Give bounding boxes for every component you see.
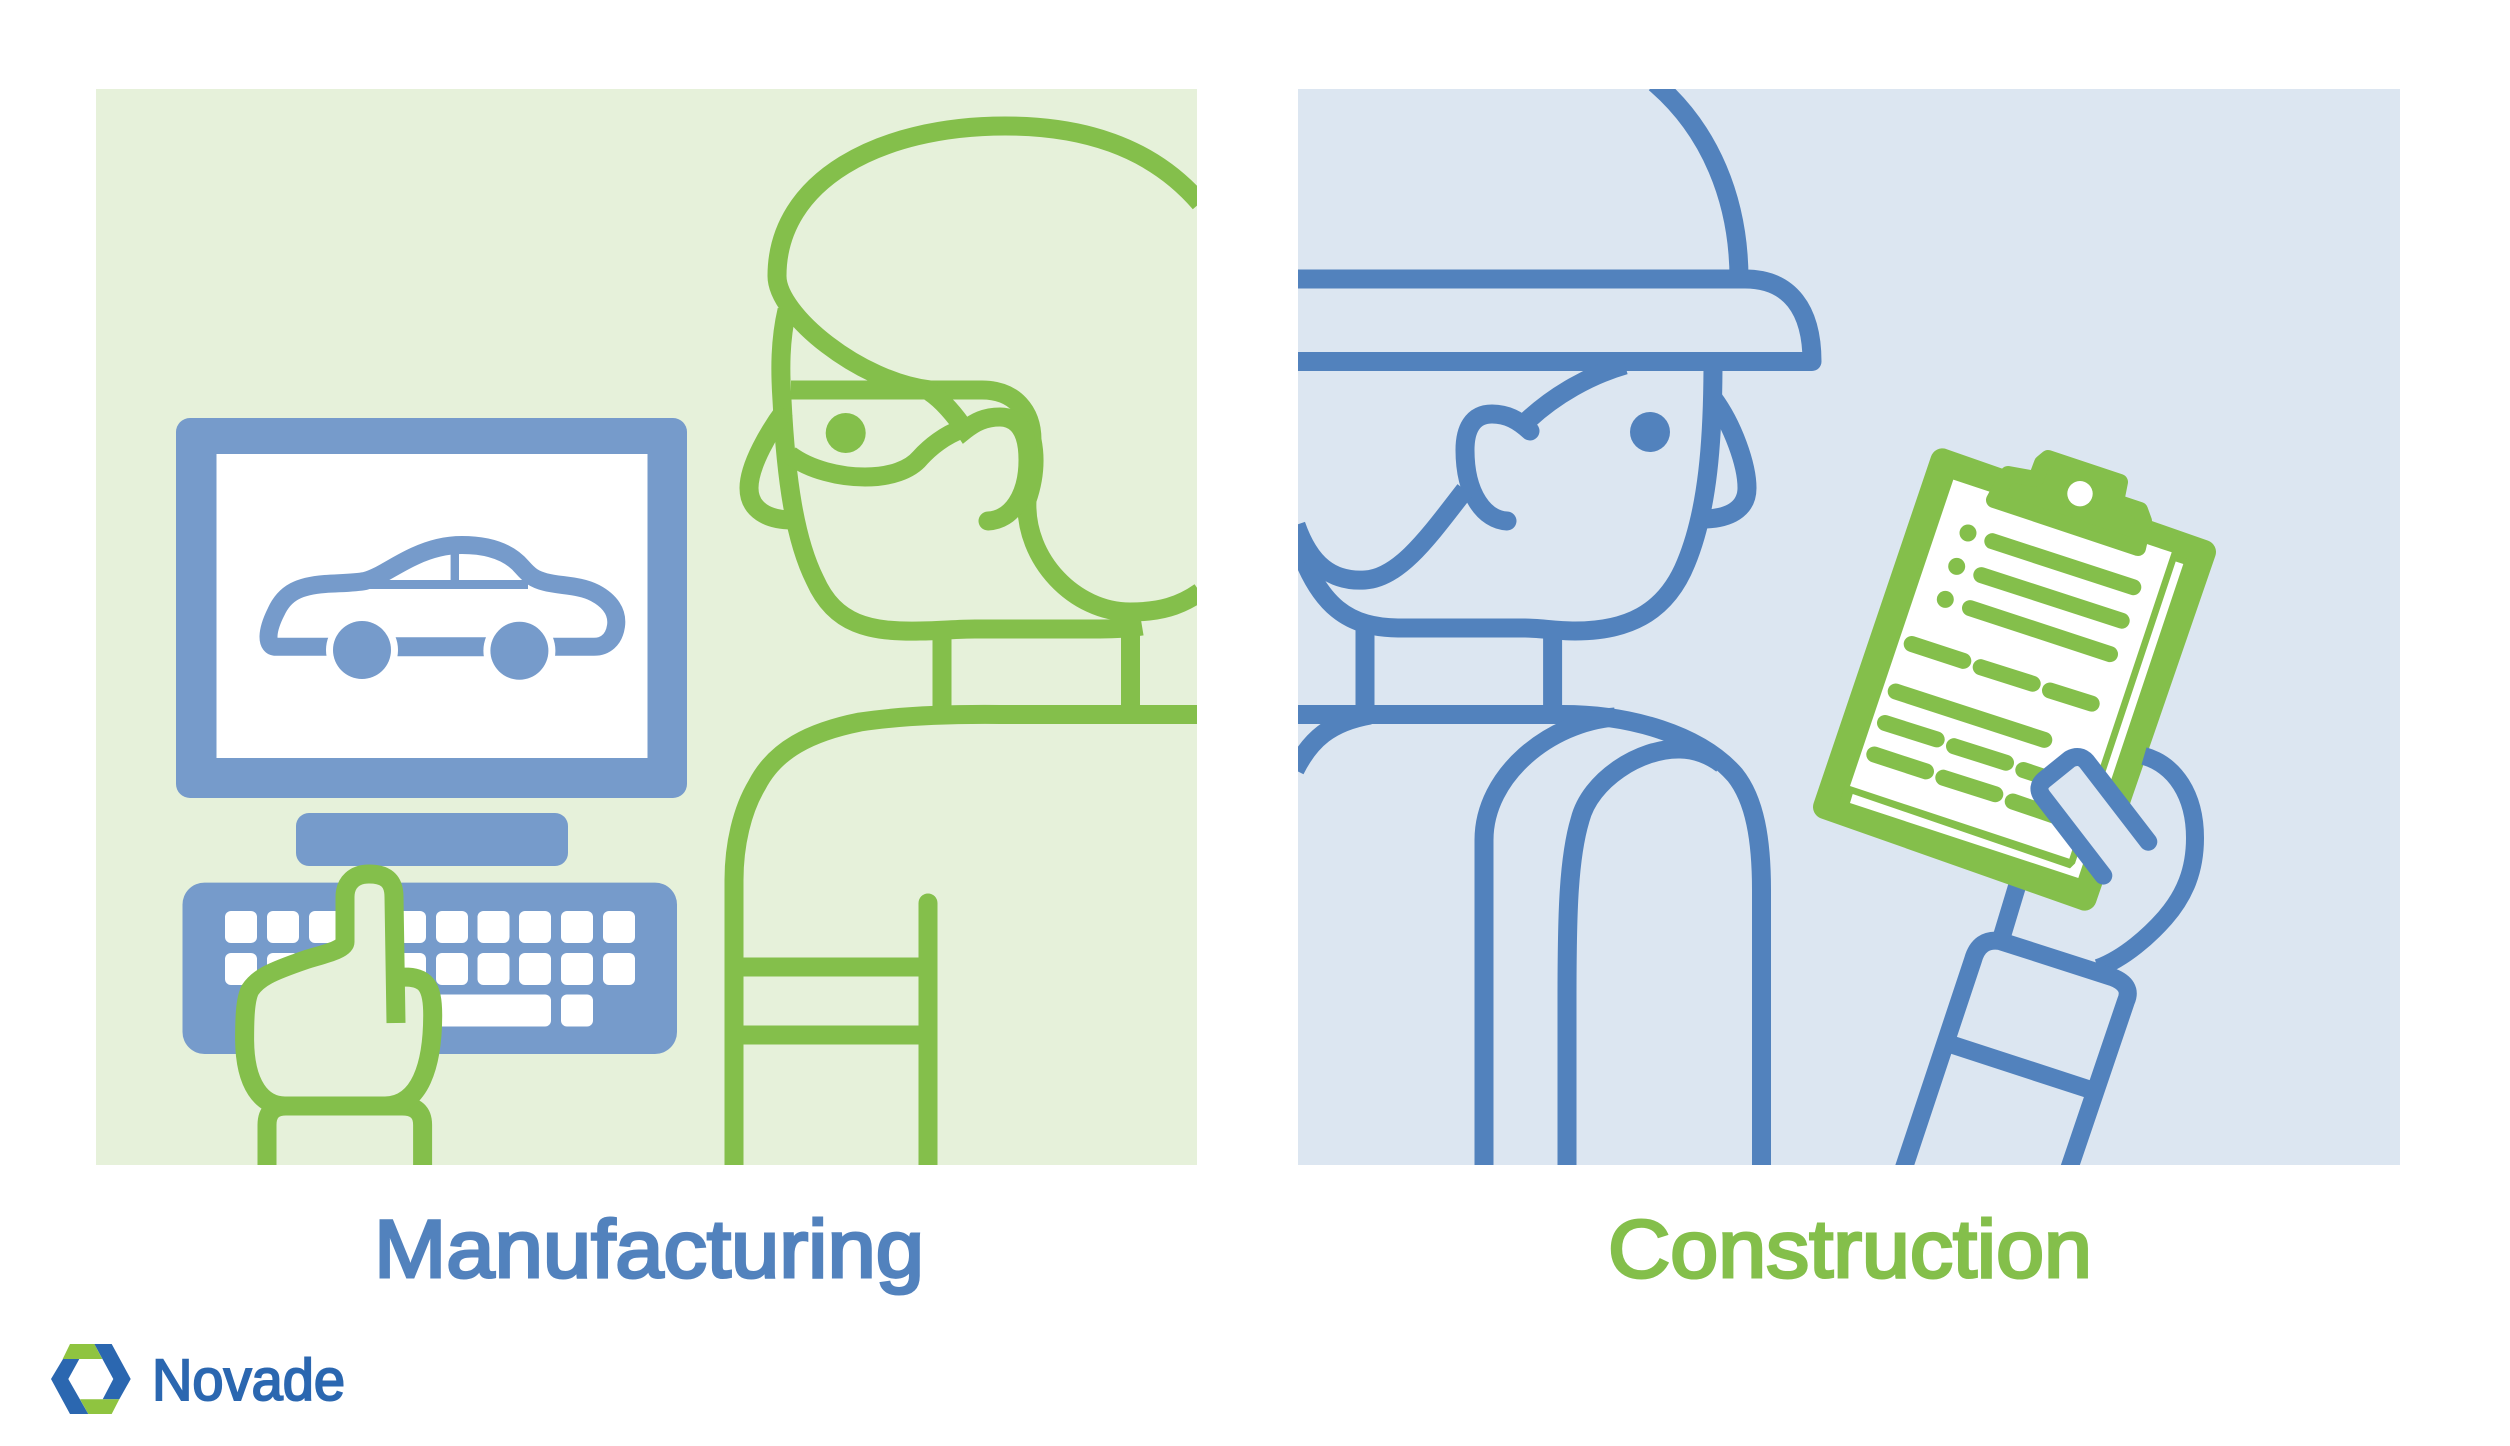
shoulder and back bbox=[734, 714, 1200, 1170]
heading: Construction: Construction bbox=[1608, 1204, 2092, 1295]
panel: manufacturing bbox=[96, 89, 1200, 1175]
panel background: construction bbox=[1298, 89, 2400, 1165]
shoulder bbox=[1290, 714, 1762, 1170]
left arm bbox=[1295, 715, 1370, 770]
neck bbox=[1365, 628, 1553, 712]
panel: construction bbox=[1290, 83, 2400, 1172]
cheek line bbox=[790, 429, 962, 477]
worker face bbox=[1296, 361, 1713, 631]
icon: computer monitor bbox=[176, 418, 687, 798]
checklist lines bbox=[1874, 524, 2133, 816]
cap visor and hair bbox=[791, 390, 1200, 612]
hair line bbox=[1528, 365, 1625, 420]
neck bbox=[932, 636, 1140, 706]
torso left bbox=[1484, 717, 1615, 1170]
clipboard board bbox=[1825, 460, 2204, 899]
palm bbox=[2098, 756, 2195, 968]
icon: keyboard bbox=[182, 883, 677, 1054]
figure: factory worker bbox=[734, 126, 1200, 1170]
nose bbox=[930, 392, 1028, 521]
worker ear bbox=[749, 410, 792, 520]
nose bbox=[1465, 414, 1530, 521]
worker cap bbox=[777, 126, 1200, 390]
thumb bbox=[2039, 757, 2148, 876]
paper sheet front bbox=[1850, 480, 2172, 859]
figure: construction worker bbox=[1290, 83, 1812, 1170]
icon: pointing hand bbox=[245, 874, 433, 1175]
cuff band bbox=[1953, 1045, 2088, 1089]
logo: Novade bbox=[51, 1344, 345, 1414]
worker eye bbox=[826, 413, 866, 453]
logo mark bbox=[51, 1344, 131, 1414]
icon: clipboard bbox=[1825, 458, 2204, 899]
panel background: manufacturing bbox=[96, 89, 1197, 1165]
monitor stand bbox=[296, 813, 568, 866]
worker eye bbox=[1630, 412, 1670, 452]
hard hat brim bbox=[1290, 279, 1812, 362]
mouth curve bbox=[1296, 490, 1465, 580]
sleeve right edge bbox=[918, 903, 938, 1170]
logo wordmark: Novade bbox=[152, 1348, 345, 1413]
sleeve cuff bbox=[1902, 941, 2128, 1172]
icon: car on screen bbox=[268, 545, 616, 687]
worker ear bbox=[1706, 398, 1747, 519]
sleeve bands bbox=[734, 967, 928, 1035]
icon: hand holding clipboard bbox=[1902, 756, 2195, 1172]
clipboard clip bbox=[1994, 458, 2144, 548]
worker face bbox=[781, 310, 1142, 631]
torso right bbox=[1567, 749, 1722, 1170]
icon: forearm stub bbox=[2002, 883, 2018, 936]
paper sheet back bbox=[1850, 562, 2183, 878]
hard hat dome bbox=[1655, 83, 1739, 279]
heading: Manufacturing: Manufacturing bbox=[374, 1204, 924, 1295]
